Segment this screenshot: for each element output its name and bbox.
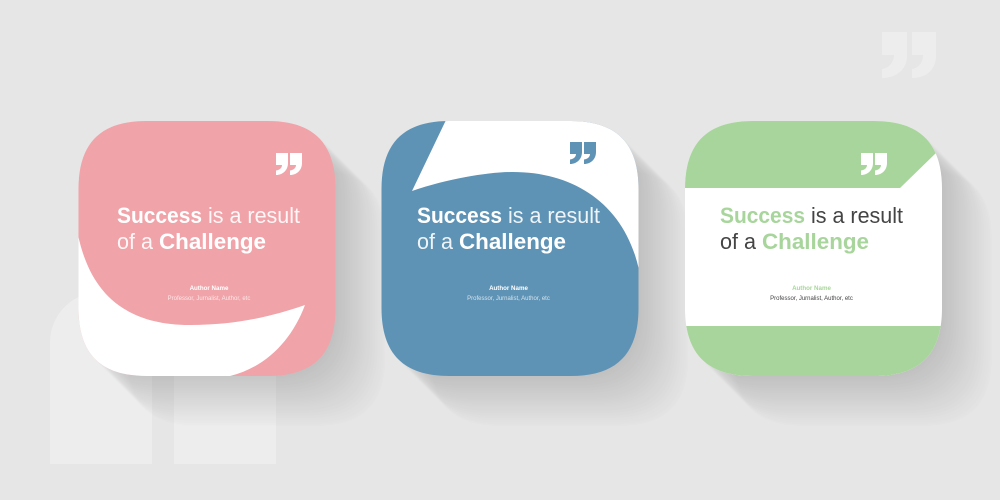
quote text: Challenge [762, 229, 869, 254]
white top shape [412, 120, 645, 270]
quote text [417, 203, 600, 254]
white leaf shape [78, 238, 305, 376]
decorative arches [50, 292, 276, 464]
quote text: Success [117, 203, 202, 228]
quote text: is a result [208, 203, 300, 228]
quote text: Challenge [459, 229, 566, 254]
green bottom band [684, 326, 943, 377]
panel: pink card [70, 121, 337, 378]
quote text: Challenge [159, 229, 266, 254]
quote text: is a result [508, 203, 600, 228]
decorative large quote mark [882, 32, 936, 78]
author: Professor, Jurnalist, Author, etc [467, 296, 550, 302]
quote text: of a [417, 229, 454, 254]
quote text: Success [417, 203, 502, 228]
quote text: Success [720, 203, 805, 228]
icon: quote mark [861, 153, 887, 175]
author: Author Name [792, 285, 831, 292]
card shadows [80, 123, 992, 426]
quote text: is a result [811, 203, 903, 228]
author: Author Name [190, 285, 229, 292]
quote text [720, 203, 903, 254]
icon: quote mark [276, 153, 302, 175]
author: Author Name [489, 285, 528, 292]
author [168, 285, 250, 302]
author: Professor, Jurnalist, Author, etc [770, 296, 853, 302]
quote text: of a [720, 229, 757, 254]
quote text [117, 203, 300, 254]
author [467, 285, 550, 302]
icon: quote mark [570, 142, 596, 164]
author: Professor, Jurnalist, Author, etc [168, 296, 250, 302]
author [770, 285, 853, 302]
panel: blue card [381, 120, 645, 377]
quote text: of a [117, 229, 154, 254]
green top band [684, 120, 945, 188]
panel: green card [684, 120, 945, 377]
